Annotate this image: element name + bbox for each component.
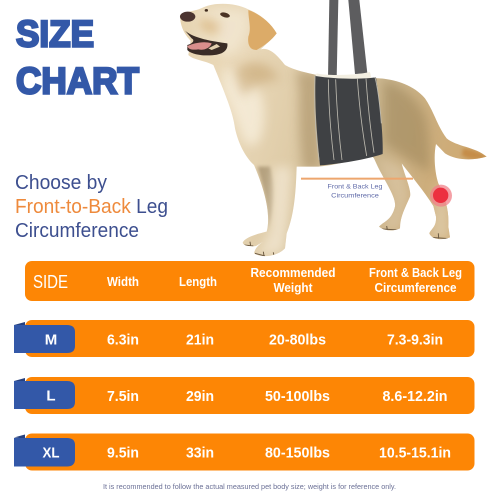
- subtitle: choose by leg circumference: Circumference: [15, 220, 139, 242]
- row: L: 7.5in: [107, 388, 139, 405]
- header: leg circumference: [369, 265, 462, 295]
- size tab XL: [14, 434, 75, 466]
- header: leg circumference: Circumference: [374, 280, 456, 295]
- mouth: [185, 31, 227, 55]
- subtitle: choose by leg circumference: Choose by: [15, 172, 107, 194]
- measure label: [327, 184, 383, 199]
- size tab L: [14, 378, 75, 409]
- table header: [25, 261, 474, 301]
- subtitle: choose by leg circumference: [15, 172, 168, 242]
- row: M: [14, 320, 474, 357]
- row: XL: 10.5-15.1in: [379, 444, 451, 462]
- row: XL: 9.5in: [107, 444, 139, 462]
- row: XL: [14, 434, 474, 470]
- subtitle: choose by leg circumference: Front-to-Back Leg: [15, 196, 168, 218]
- row: L: 8.6-12.2in: [382, 388, 448, 405]
- size tab M: M: [45, 332, 57, 348]
- row: XL: 33in: [186, 444, 214, 462]
- paw toes: [244, 226, 449, 256]
- measure line: [301, 178, 413, 180]
- row: L: 29in: [186, 388, 214, 405]
- dog body: [180, 4, 486, 256]
- red marker on leg: [430, 185, 452, 207]
- size tab M: [14, 322, 75, 353]
- title: size chart: [16, 14, 139, 102]
- header: side: SIDE: [33, 272, 68, 292]
- row: M: 20-80lbs: [269, 332, 326, 348]
- header: recommended weight: Weight: [274, 280, 313, 295]
- harness panel: [315, 75, 383, 165]
- row: M: 7.3-9.3in: [387, 332, 443, 348]
- row: M: 21in: [186, 332, 214, 348]
- size tab L: L: [46, 388, 56, 404]
- title: size chart: SIZE: [16, 14, 94, 54]
- eye: [220, 11, 230, 19]
- footnote: It is recommended to follow the actual measured pet body size; weight is for reference only.: [103, 482, 396, 491]
- header: width: Width: [107, 274, 139, 289]
- body shading: [295, 72, 320, 170]
- nose: [180, 12, 195, 22]
- header: leg circumference: Front & Back Leg: [369, 265, 462, 280]
- row: L: [14, 377, 474, 414]
- tail tip: [462, 148, 488, 159]
- header: recommended weight: Recommended: [250, 265, 336, 280]
- row: M: 6.3in: [107, 332, 139, 348]
- harness straps: [328, 0, 367, 78]
- header: length: Length: [179, 274, 217, 289]
- header: recommended weight: [250, 265, 336, 295]
- illustration: labrador wearing support harness: [180, 0, 486, 256]
- measure label: Front & Back Leg: [327, 184, 383, 191]
- row: L: 50-100lbs: [265, 388, 330, 405]
- title: size chart: CHART: [16, 60, 139, 102]
- row: XL: 80-150lbs: [265, 444, 330, 462]
- ear: [248, 10, 277, 50]
- size tab XL: XL: [42, 444, 60, 462]
- harness fleece trim: [315, 72, 371, 79]
- measure label: Circumference: [331, 192, 379, 199]
